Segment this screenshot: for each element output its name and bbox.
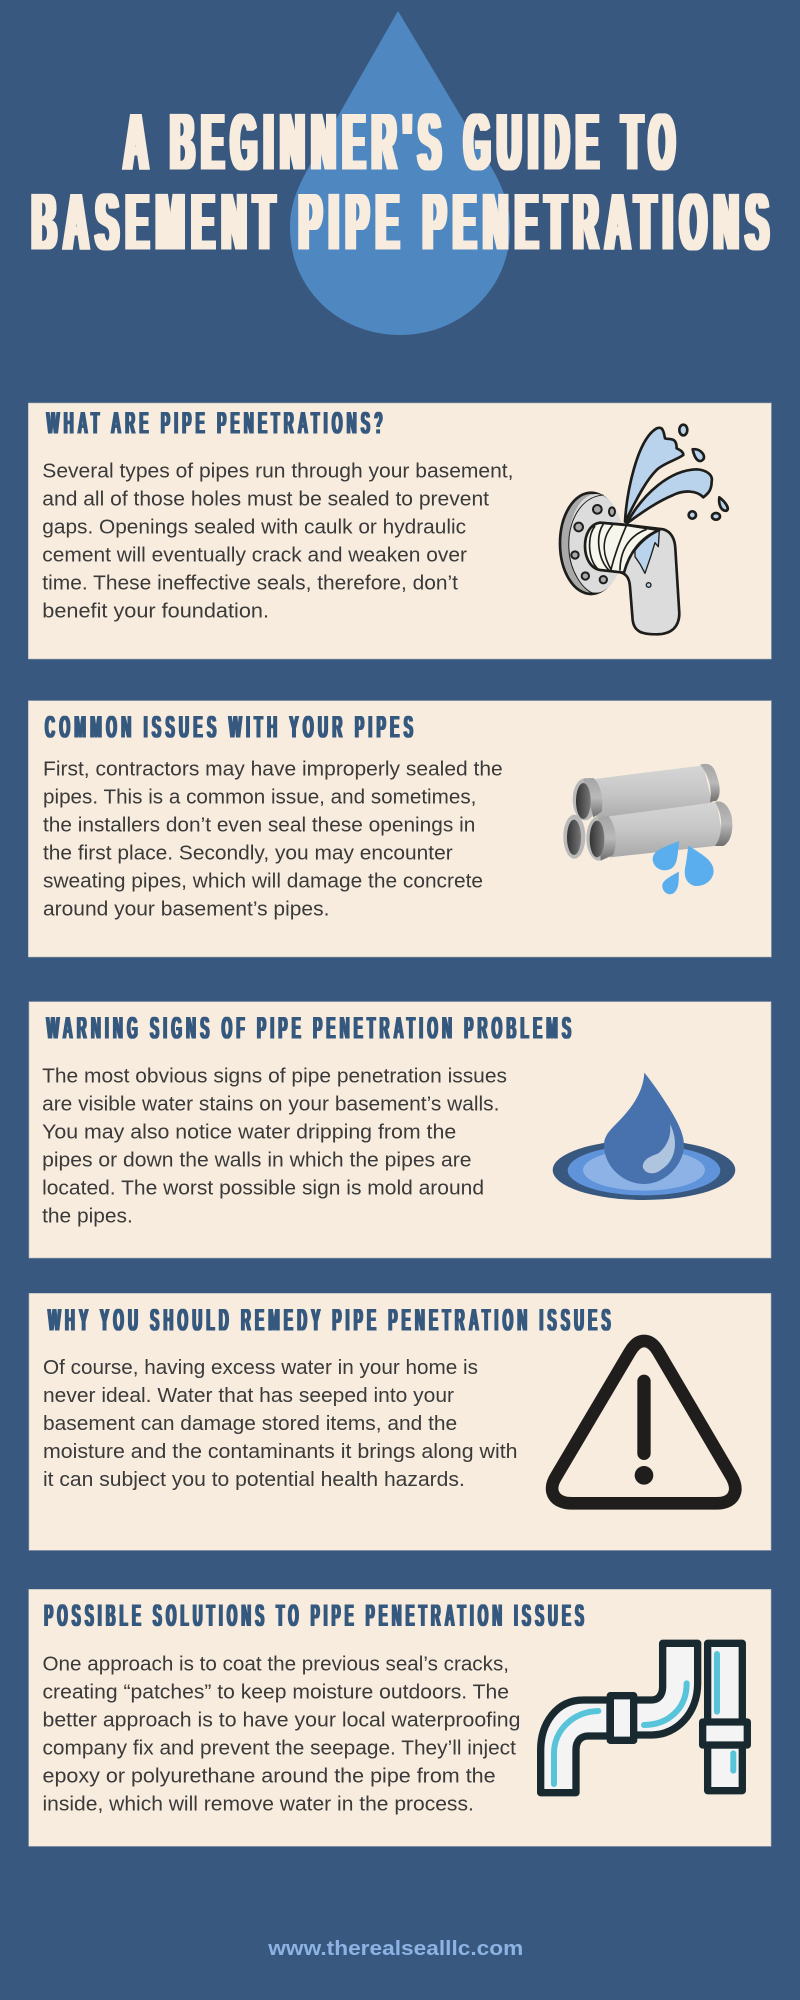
title	[32, 98, 776, 267]
text block: why you should remedy: moisture and the contaminants it brings along with	[43, 1440, 518, 1463]
panel: warning signs	[29, 1002, 771, 1258]
icon: stacked sweating pipes	[563, 764, 732, 894]
text block: warning signs: pipes or down the walls in which the pipes are	[42, 1148, 471, 1171]
text block: what are pipe penetrations: benefit your foundation.	[42, 599, 269, 622]
text block: why you should remedy: it can subject you to potential health hazards.	[43, 1468, 465, 1491]
text block: common issues with your pipes: the first place. Secondly, you may encounter	[43, 842, 453, 865]
text block: warning signs: located. The worst possible sign is mold around	[42, 1176, 484, 1199]
text block: why you should remedy	[43, 1356, 518, 1491]
text block: possible solutions: One approach is to coat the previous seal’s cracks,	[42, 1652, 509, 1675]
text block: why you should remedy: Of course, having excess water in your home is	[43, 1356, 478, 1379]
text block: common issues with your pipes: around your basement’s pipes.	[43, 898, 329, 921]
text block: common issues with your pipes: sweating pipes, which will damage the concrete	[43, 870, 483, 893]
panel: common issues with your pipes	[28, 701, 771, 957]
text block: possible solutions	[42, 1652, 520, 1815]
icon: warning triangle	[552, 1341, 735, 1503]
text block: warning signs	[42, 1064, 507, 1227]
text block: possible solutions: creating “patches” to keep moisture outdoors. The	[42, 1680, 509, 1703]
icon: connected pipes	[541, 1643, 747, 1793]
panel: why you should remedy	[29, 1293, 771, 1550]
text block: common issues with your pipes	[43, 758, 503, 921]
text block: what are pipe penetrations: cement will eventually crack and weaken over	[42, 543, 467, 566]
text block: possible solutions: epoxy or polyurethane around the pipe from the	[42, 1764, 496, 1787]
panel: what are pipe penetrations	[28, 403, 771, 659]
text block: warning signs: the pipes.	[42, 1204, 133, 1227]
panel: possible solutions	[29, 1589, 771, 1846]
text block: what are pipe penetrations: gaps. Openings sealed with caulk or hydraulic	[42, 515, 466, 538]
icon: large background water drop	[290, 11, 510, 335]
text block: possible solutions: inside, which will remove water in the process.	[42, 1792, 474, 1815]
text block: what are pipe penetrations: Several types of pipes run through your basement,	[42, 459, 514, 482]
icon: water drop and puddle	[553, 1073, 735, 1200]
text block: why you should remedy: never ideal. Water that has seeped into your	[43, 1384, 454, 1407]
text block: possible solutions: better approach is to have your local waterproofing	[42, 1708, 520, 1731]
icon: leaking bandaged pipe	[560, 425, 728, 634]
text block: what are pipe penetrations	[42, 459, 514, 622]
text block: why you should remedy: basement can damage stored items, and the	[43, 1412, 457, 1435]
text block: warning signs: The most obvious signs of pipe penetration issues	[42, 1064, 507, 1087]
text block: common issues with your pipes: pipes. This is a common issue, and sometimes,	[43, 786, 476, 809]
text block: common issues with your pipes: First, contractors may have improperly sealed the	[43, 758, 503, 781]
footer website: www.therealsealllc.com	[267, 1937, 523, 1960]
text block: common issues with your pipes: the installers don’t even seal these openings in	[43, 814, 475, 837]
text block: warning signs: are visible water stains on your basement’s walls.	[42, 1092, 499, 1115]
text block: warning signs: You may also notice water dripping from the	[42, 1120, 456, 1143]
text block: what are pipe penetrations: and all of those holes must be sealed to prevent	[42, 487, 489, 510]
text block: possible solutions: company fix and prevent the seepage. They’ll inject	[42, 1736, 516, 1759]
text block: what are pipe penetrations: time. These ineffective seals, therefore, don’t	[42, 571, 458, 594]
